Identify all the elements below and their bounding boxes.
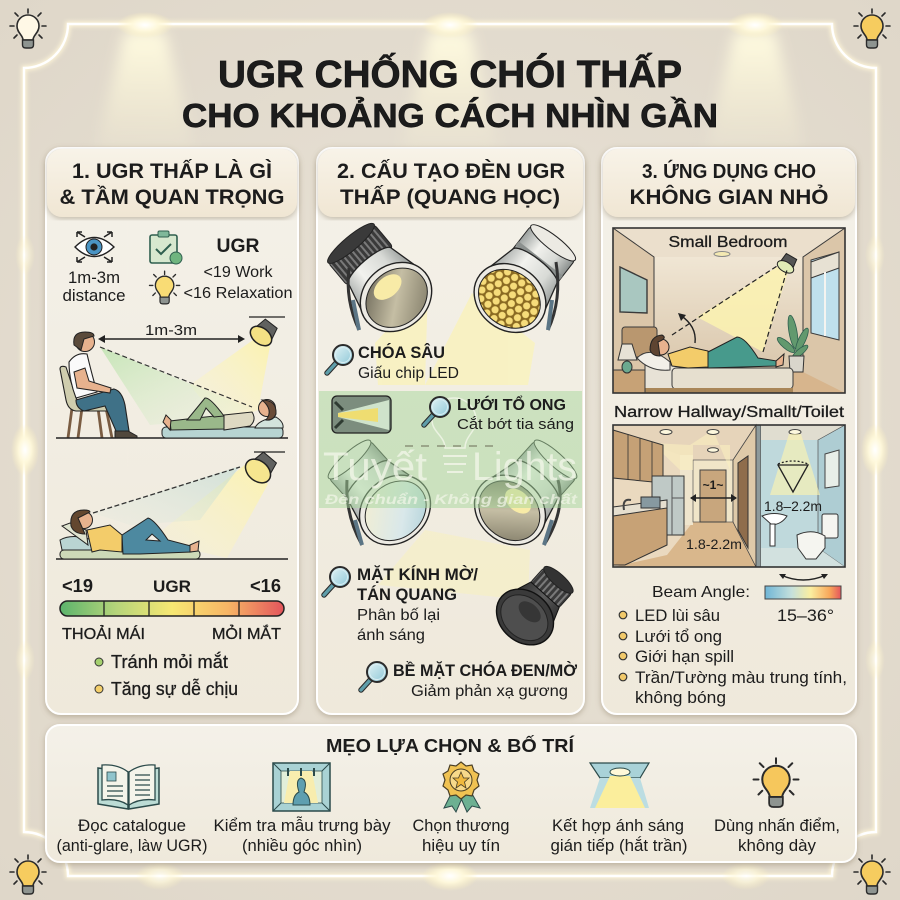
panel: ứng dụng: [602, 148, 856, 714]
lamp: open reflector: [460, 429, 588, 559]
callout: mặt kính mờ: MẶT KÍNH MỜ/: [357, 565, 478, 584]
benefits list: [95, 651, 238, 699]
lamp: deep reflector: [317, 214, 446, 346]
watermark band: Lights: [472, 445, 577, 489]
UGR scale: <16: [250, 576, 281, 596]
icon: corner bulb top right: [854, 9, 890, 48]
UGR scale: MỎI MẮT: [212, 625, 282, 643]
icon: beam cut diagram: [332, 396, 391, 433]
lamp: honeycomb: [460, 214, 587, 347]
tip labels: Kiểm tra mẫu trưng bày: [214, 816, 391, 835]
callout: chóa sâu: CHÓA SÂU: [358, 343, 445, 362]
lamp: frosted glass: [317, 429, 445, 559]
tip labels: (nhiều góc nhìn): [242, 837, 362, 855]
watermark band: Đèn chuẩn - Không gian chất: [325, 491, 579, 507]
heading: tips: MẸO LỰA CHỌN & BỐ TRÍ: [326, 735, 575, 756]
icon: display sample: [273, 763, 330, 811]
UGR limits: UGR: [216, 236, 260, 257]
UGR scale: [60, 576, 284, 643]
tip labels: Dùng nhấn điểm,: [714, 817, 840, 835]
heading panel 3: KHÔNG GIAN NHỎ: [630, 185, 828, 209]
UGR scale: UGR: [153, 577, 191, 596]
tips list: Lưới tổ ong: [635, 628, 722, 646]
title: [182, 51, 718, 134]
callout: bề mặt chóa đen: BỀ MẶT CHÓA ĐEN/MỜ: [393, 661, 578, 680]
heading panel 2: [318, 149, 583, 217]
panel: mẹo lựa chọn: [46, 725, 856, 862]
panel: UGR thấp là gì: [46, 148, 298, 714]
icon: corner bulb bottom right: [854, 855, 890, 894]
UGR scale: THOẢI MÁI: [62, 626, 145, 643]
callout: mặt kính mờ: [324, 565, 478, 644]
heading panel 1: [47, 149, 297, 217]
tip labels: Chọn thương: [412, 817, 510, 835]
benefits list: Tránh mỏi mắt: [111, 651, 228, 672]
UGR limits: <19 Work: [204, 264, 274, 281]
tips list: [619, 607, 847, 707]
scene: hallway and toilet: ~1~: [703, 478, 723, 492]
panel: cấu tạo đèn: [317, 148, 588, 714]
icon: catalogue book: [98, 765, 159, 809]
callout: lưới tổ ong: [424, 395, 574, 433]
heading panel 2: THẤP (QUANG HỌC): [340, 186, 560, 209]
scene: hallway and toilet: 1.8–2.2m: [764, 499, 822, 514]
light beams behind lamps: [375, 285, 535, 600]
callout: lưới tổ ong: LƯỚI TỔ ONG: [457, 395, 566, 414]
tip labels: không dày: [738, 837, 817, 855]
callout: mặt kính mờ: Phân bố lại: [357, 607, 440, 624]
icon: indirect ceiling light: [590, 763, 649, 808]
callout: bề mặt chóa đen: Giảm phản xạ gương: [411, 683, 568, 700]
scene: seated viewer and lying person: 1m-3m: [145, 322, 197, 339]
heading panel 2: 2. CẤU TẠO ĐÈN UGR: [337, 160, 565, 183]
scene: small bedroom: [613, 228, 845, 393]
title: UGR CHỐNG CHÓI THẤP: [218, 51, 682, 96]
icon: eye with corner arrows: [75, 232, 114, 262]
distance label: 1m-3m: [68, 269, 120, 287]
tip labels: gián tiếp (hắt trần): [550, 836, 688, 855]
callout: lưới tổ ong: Cắt bớt tia sáng: [457, 416, 574, 433]
scene: lying person looking at lamp: [56, 448, 288, 559]
callout: bề mặt chóa đen: [361, 661, 578, 700]
icon: clipboard check: [150, 231, 182, 264]
tip labels: Kết hợp ánh sáng: [552, 817, 684, 835]
UGR limits: <16 Relaxation: [184, 285, 292, 302]
icon: accent bulb: [754, 758, 798, 807]
title: CHO KHOẢNG CÁCH NHÌN GẦN: [182, 97, 718, 134]
heading panel 3: 3. ỨNG DỤNG CHO: [642, 159, 816, 183]
lamp: black matte reflector: [485, 555, 586, 656]
heading panel 1: 1. UGR THẤP LÀ GÌ: [72, 160, 272, 183]
tip labels: hiệu uy tín: [422, 837, 500, 855]
callout: mặt kính mờ: ánh sáng: [357, 627, 425, 644]
benefits list: Tăng sự dễ chịu: [111, 678, 238, 699]
beam angle legend: Beam Angle:: [652, 584, 750, 601]
tips list: không bóng: [635, 689, 726, 707]
distance label: distance: [62, 287, 126, 305]
tips list: Giới hạn spill: [635, 648, 734, 666]
tip labels: (anti-glare, làw UGR): [56, 837, 208, 855]
beam angle legend: [652, 574, 841, 625]
icon: medal: [443, 762, 480, 812]
icon: small bulb: [149, 271, 180, 304]
callout: chóa sâu: Giấu chip LED: [358, 365, 459, 382]
UGR scale: <19: [62, 576, 93, 596]
icon: corner bulb bottom left: [10, 855, 46, 894]
tip labels: [56, 816, 840, 855]
scene: seated viewer and lying person: [56, 316, 288, 438]
distance label: [62, 269, 126, 305]
heading panel 3: [603, 149, 855, 217]
callout: mặt kính mờ: TÁN QUANG: [357, 585, 457, 604]
tip labels: Đọc catalogue: [78, 817, 186, 835]
scene: hallway and toilet: [613, 425, 845, 567]
watermark band: Tuyết: [323, 445, 427, 489]
beam angle legend: 15–36°: [777, 606, 834, 625]
tips list: Trần/Tường màu trung tính,: [635, 669, 847, 687]
heading panel 1: & TẦM QUAN TRỌNG: [60, 186, 284, 209]
tips list: LED lùi sâu: [635, 607, 720, 625]
UGR limits: [184, 236, 292, 302]
watermark band: [319, 391, 582, 508]
icon: corner bulb top left: [10, 9, 46, 48]
scene: hallway and toilet: 1.8-2.2m: [686, 537, 742, 552]
label: small bedroom: Small Bedroom: [668, 234, 788, 251]
heading: narrow hallway: Narrow Hallway/Smallt/Toilet: [614, 404, 845, 421]
callout: chóa sâu: [327, 343, 459, 382]
